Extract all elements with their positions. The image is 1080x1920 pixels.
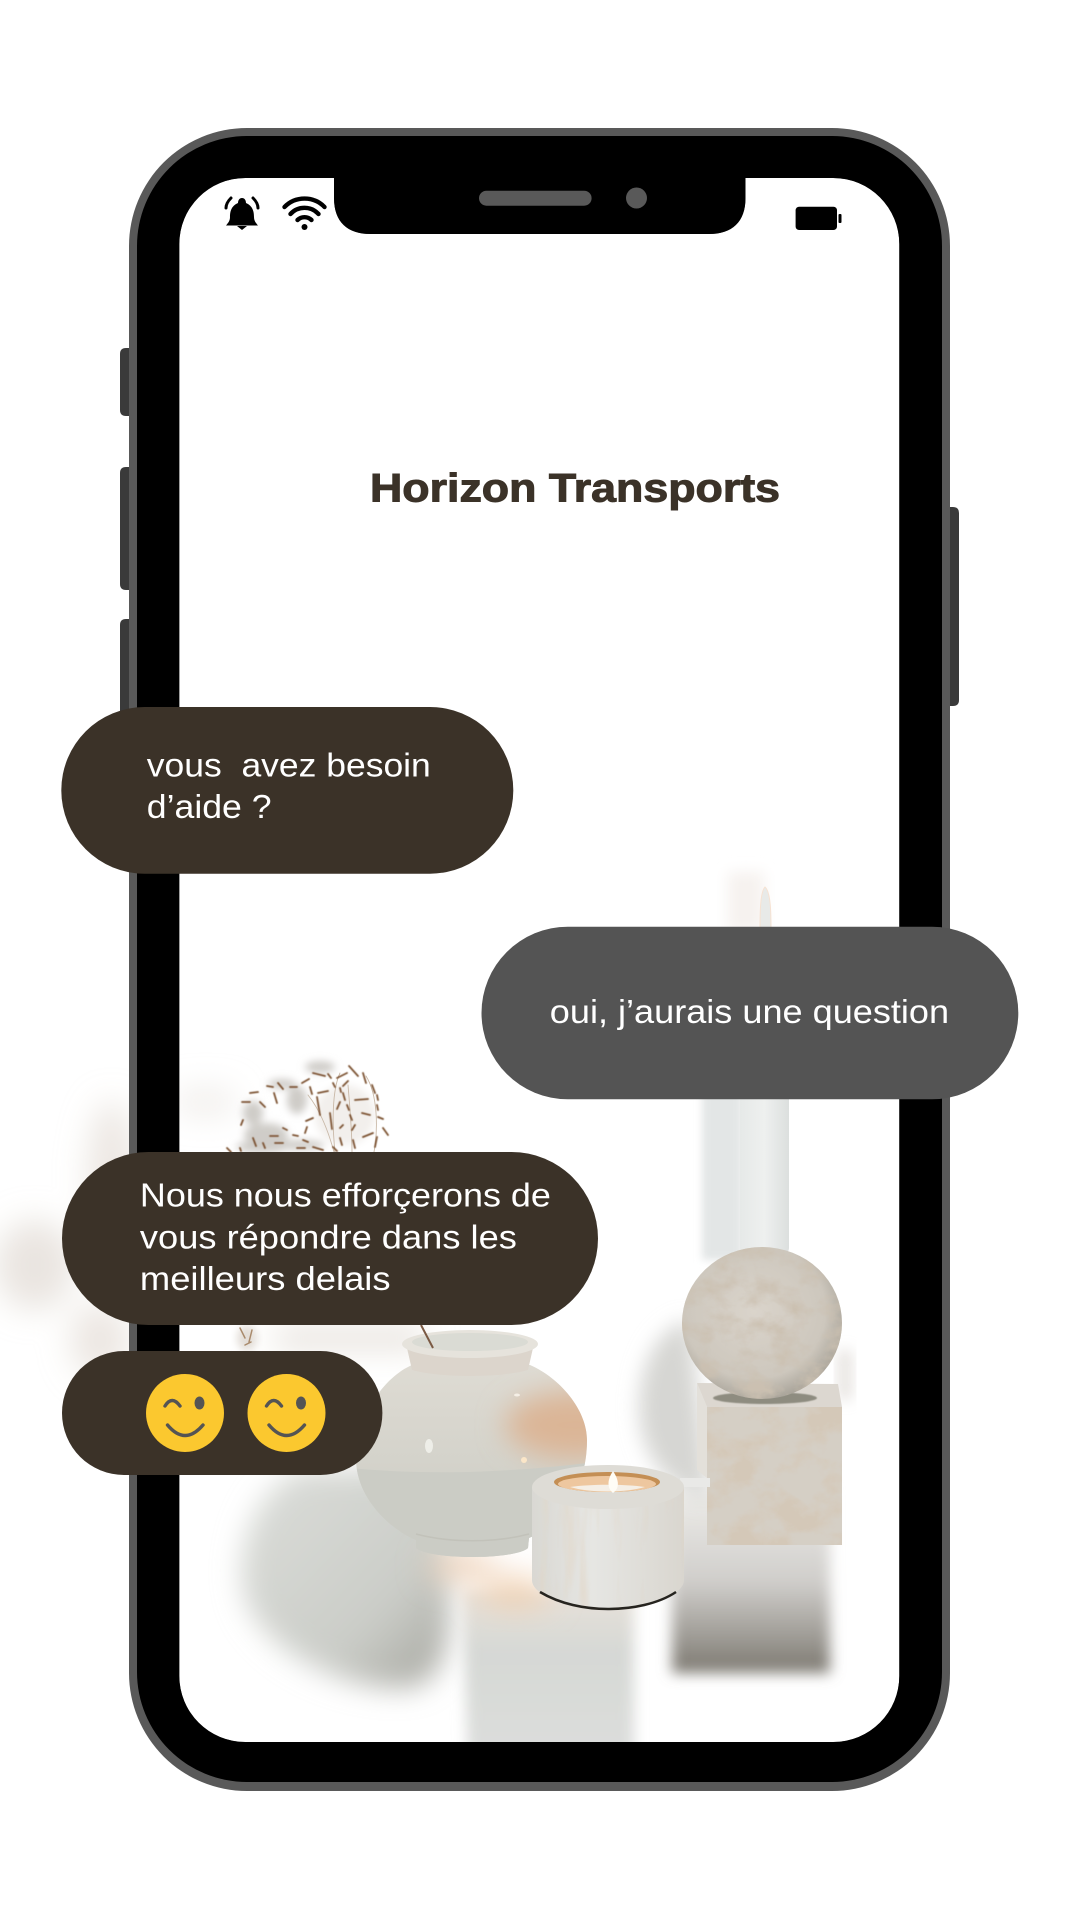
bubble text: meilleurs delais — [140, 1260, 391, 1297]
blurred dried flower left of phone — [0, 1090, 425, 1378]
bubble text: vous répondre dans les — [140, 1218, 517, 1256]
blurred candle — [702, 1090, 742, 1260]
icon: winking smiley 1 — [146, 1374, 224, 1452]
marble block — [697, 1383, 842, 1545]
chat bubble: user reply — [482, 927, 1018, 1099]
icon: battery — [796, 207, 842, 230]
dried flower — [227, 1061, 388, 1153]
icon: wifi — [284, 199, 324, 230]
chat bubble: question from support — [61, 707, 513, 874]
title: Horizon Transports — [370, 467, 780, 511]
blurred block reflection — [672, 1490, 830, 1673]
black bezel — [137, 136, 942, 1782]
photo: blurred reflections behind the objects — [0, 872, 852, 1765]
bubble text: d’aide ? — [147, 788, 272, 825]
camera — [626, 188, 647, 208]
bubble text: Nous nous efforçerons de — [140, 1176, 551, 1214]
candle — [740, 1090, 789, 1254]
phone frame — [120, 128, 959, 1791]
icon: winking smiley 2 — [248, 1374, 326, 1452]
flower tip below bubble — [237, 1325, 257, 1351]
candle halo — [728, 872, 764, 932]
sphere contact shadow — [713, 1392, 817, 1404]
small connector behind holder — [680, 1478, 710, 1487]
vase stem — [421, 1325, 433, 1348]
blurred vase reflection — [242, 1470, 450, 1688]
blurred holder reflection — [462, 1590, 634, 1765]
chat bubble: emoji — [62, 1351, 382, 1475]
shadow right of sphere — [838, 1350, 852, 1400]
candle flame tip — [760, 887, 771, 930]
candle holder — [532, 1465, 684, 1609]
chat bubble: support answer — [62, 1152, 598, 1325]
bubble text — [140, 1176, 551, 1297]
speaker — [479, 191, 592, 206]
vase — [356, 1330, 587, 1557]
bubble text — [147, 746, 431, 825]
warm glow under vase — [428, 1554, 551, 1606]
bubble text: vous avez besoin — [147, 746, 431, 784]
wall shadow behind sphere — [639, 1320, 710, 1500]
grey outer rim — [129, 128, 950, 1791]
side buttons — [120, 348, 959, 740]
icon: bell — [226, 198, 258, 230]
marble sphere — [682, 1247, 842, 1399]
bubble text: oui, j’aurais une question — [550, 993, 949, 1030]
